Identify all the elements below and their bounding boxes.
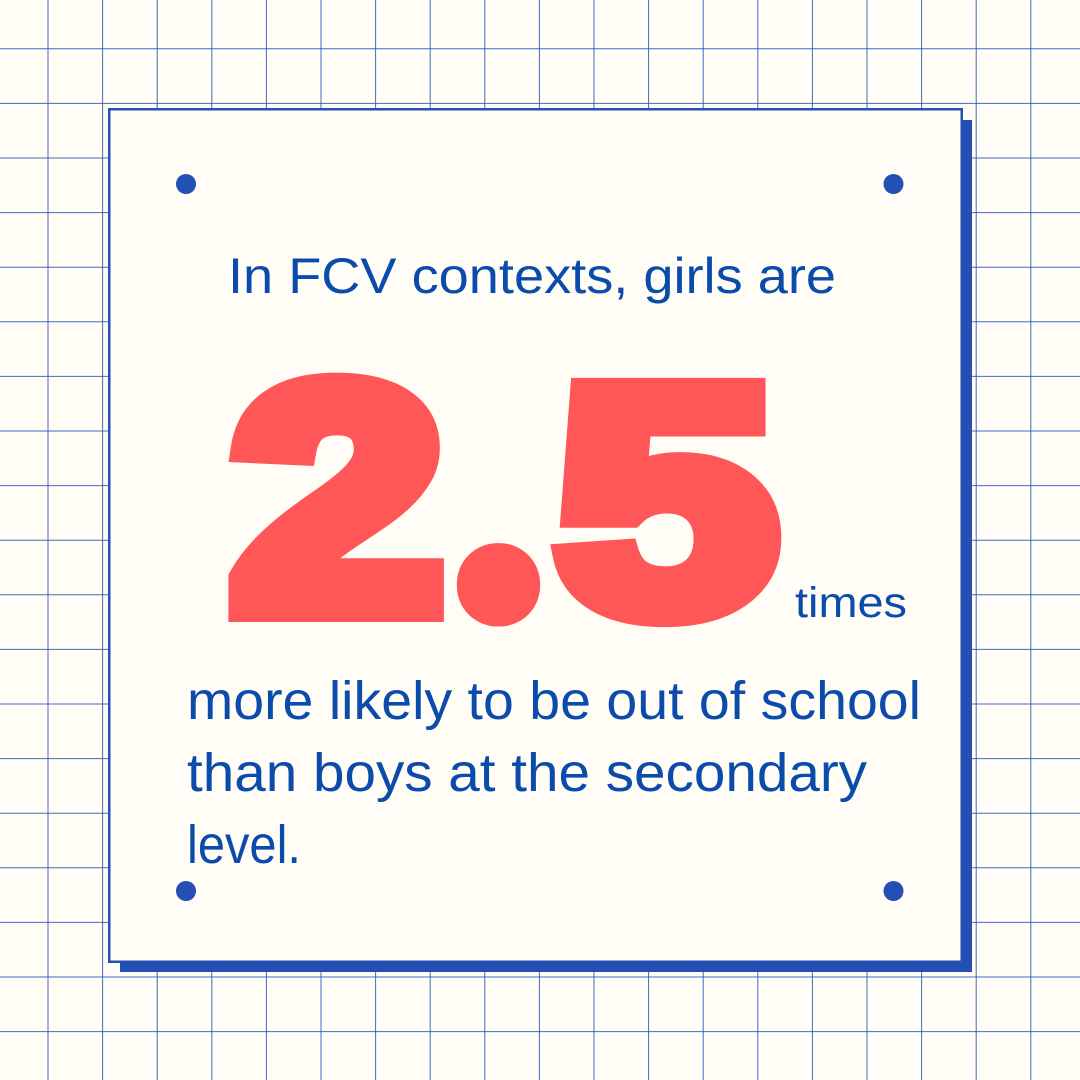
label: times: times	[795, 579, 907, 627]
icon: dot bottom left	[176, 881, 196, 901]
body text: conclusion: than boys at the secondary	[187, 743, 867, 803]
heading: intro line: In FCV contexts, girls are	[228, 248, 836, 304]
big number: 2.5: .	[496, 573, 501, 590]
panel: offset shadow	[120, 120, 972, 972]
big number: 2.5: 5	[557, 323, 776, 680]
icon: dot bottom right	[884, 881, 904, 901]
big number: 2.5	[232, 321, 776, 680]
body text: conclusion	[187, 671, 921, 875]
icon: dot top left	[176, 174, 196, 194]
big number: 2.5: 2	[232, 321, 442, 675]
icon: dot top right	[884, 174, 904, 194]
body text: conclusion: more likely to be out of school	[187, 671, 921, 731]
body text: conclusion: level.	[187, 815, 301, 875]
panel: main card	[109, 109, 962, 962]
